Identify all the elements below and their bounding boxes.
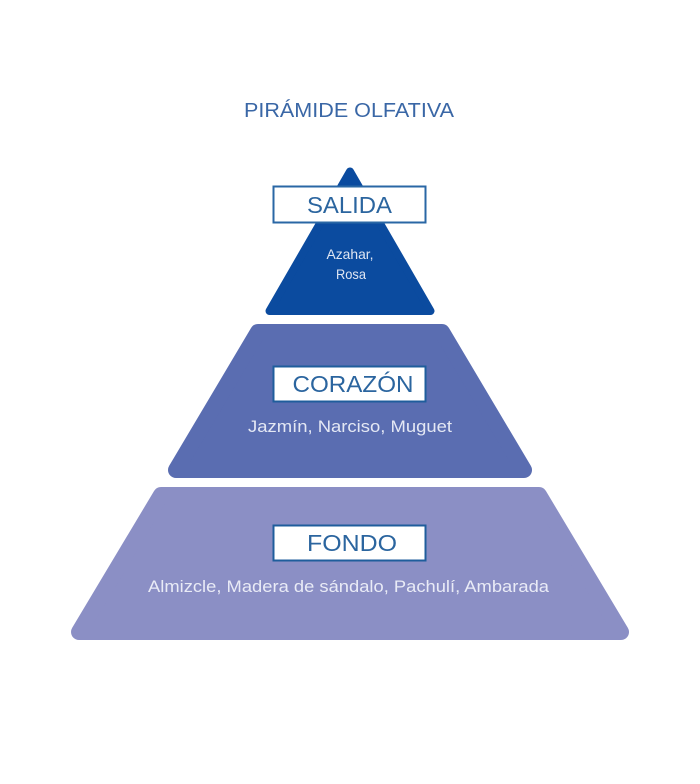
- notes: salida: [326, 246, 374, 282]
- triangle: top tier: [270, 172, 430, 311]
- trapezoid: bottom tier: [79, 495, 621, 632]
- title: PIRÁMIDE OLFATIVA: [244, 99, 455, 122]
- tier: corazón: [176, 332, 524, 470]
- notes: salida: Azahar,: [326, 246, 374, 262]
- notes: salida: Rosa: [336, 266, 366, 282]
- label box: corazón: [274, 366, 426, 402]
- trapezoid: middle tier: [176, 332, 524, 470]
- notes: fondo: Almizcle, Madera de sándalo, Pachulí, Ambarada: [148, 577, 550, 596]
- label box: corazón: CORAZÓN: [292, 371, 414, 397]
- label box: fondo: [274, 526, 426, 560]
- tier: salida: [270, 172, 430, 311]
- notes: corazón: Jazmín, Narciso, Muguet: [248, 417, 452, 436]
- tier: fondo: [79, 495, 621, 632]
- label box: salida: SALIDA: [307, 192, 393, 218]
- label box: salida: [274, 186, 426, 222]
- label box: fondo: FONDO: [307, 530, 397, 556]
